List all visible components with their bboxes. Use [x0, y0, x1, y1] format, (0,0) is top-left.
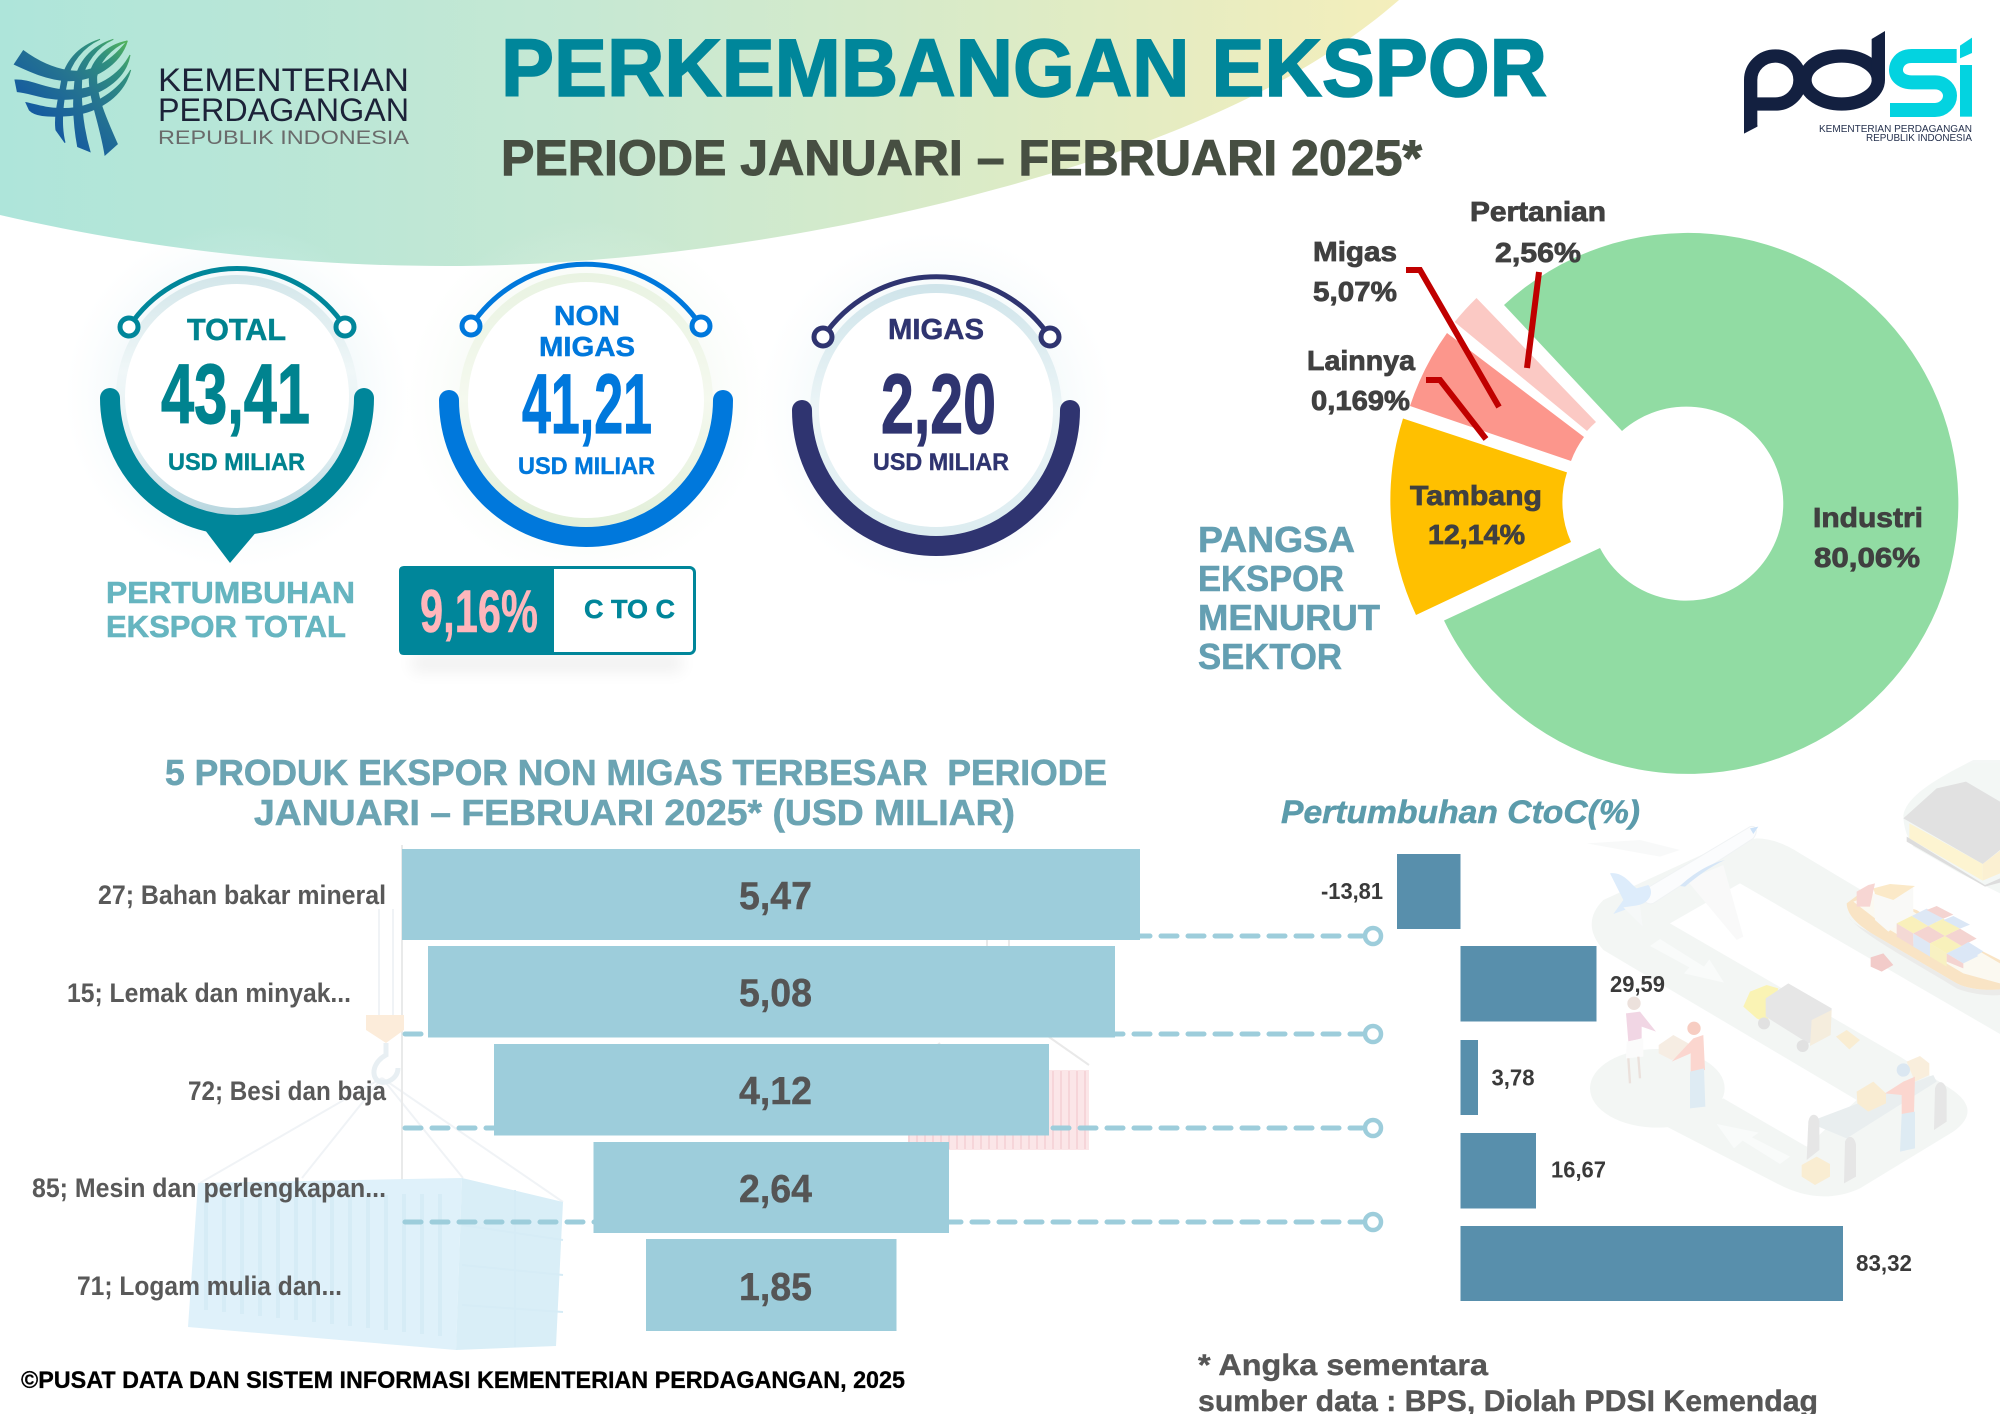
label line 1: NON [554, 300, 620, 331]
growth value: 9,16% [420, 578, 538, 645]
red container cables [908, 930, 1089, 1070]
bar: 85 [594, 1142, 949, 1233]
value: 43,41 [161, 347, 310, 441]
value: 41,21 [522, 357, 652, 451]
logo text line 1: KEMENTERIAN [158, 62, 409, 98]
people handing parcel [1626, 997, 1705, 1108]
conveyor with worker [1802, 1056, 1947, 1185]
bar: 15 [428, 946, 1115, 1038]
labels: 5,07% [1313, 276, 1397, 307]
category labels: 15; Lemak dan minyak... [67, 978, 351, 1008]
crane hook block [366, 1015, 404, 1043]
growth heading: PERTUMBUHAN [106, 575, 355, 610]
logo text line 3: REPUBLIK INDONESIA [158, 127, 409, 149]
labels: Pertanian [1470, 196, 1606, 227]
dashed connectors [405, 928, 1381, 1230]
bar values: -13,81 [1321, 878, 1383, 904]
pdsi caption line 2: REPUBLIK INDONESIA [1866, 132, 1972, 144]
container ridges [206, 1190, 563, 1347]
logo: PDSI [1744, 31, 1972, 144]
products heading: 5 PRODUK EKSPOR NON MIGAS TERBESAR PERIODE [165, 752, 1107, 793]
road [1592, 838, 2000, 1196]
growth heading [106, 575, 355, 644]
labels: Industri [1813, 502, 1923, 533]
labels: Lainnya [1307, 345, 1415, 376]
unit: USD MILIAR [873, 449, 1009, 476]
category labels: 85; Mesin dan perlengkapan... [32, 1173, 386, 1203]
person blob [1590, 1049, 1725, 1128]
slice: pertanian [1455, 298, 1596, 431]
airplane [1587, 826, 1758, 940]
growth value box [399, 566, 694, 672]
value: 2,20 [881, 357, 996, 451]
bar: 71 [646, 1239, 896, 1331]
logo text line 2: PERDAGANGAN [158, 92, 409, 128]
logo: Kementerian Perdagangan [14, 39, 409, 155]
labels: 0,169% [1311, 385, 1410, 416]
bar values: 3,78 [1492, 1064, 1535, 1090]
warehouse [1903, 782, 2000, 887]
bar: 83,32 [1460, 1226, 1843, 1301]
bar chart: growth CtoC [1321, 854, 1912, 1301]
leader line: migas [1406, 270, 1499, 407]
bar values [1321, 878, 1912, 1276]
slice: tambang [1390, 418, 1571, 615]
slice: migas and lainnya [1410, 333, 1584, 461]
unit: USD MILIAR [168, 449, 305, 476]
bar values: 5,08 [739, 972, 812, 1015]
source note [1198, 1349, 1818, 1414]
bar: 29,59 [1460, 946, 1596, 1022]
donut chart: export share by sector [1307, 196, 1958, 774]
crane cables [200, 909, 563, 1202]
donut heading: SEKTOR [1198, 636, 1342, 677]
labels: 2,56% [1495, 237, 1581, 268]
crane hook [374, 1043, 398, 1082]
category labels: 27; Bahan bakar mineral [98, 880, 386, 910]
growth heading: EKSPOR TOTAL [106, 609, 346, 644]
gauge: total [65, 224, 409, 568]
red container ridges [908, 1071, 1089, 1149]
labels: Tambang [1410, 480, 1542, 511]
bar values [739, 875, 812, 1309]
labels [1307, 196, 1923, 573]
main title: PERKEMBANGAN EKSPOR [501, 23, 1547, 114]
label line 2: MIGAS [539, 331, 635, 362]
gauge: non migas [406, 220, 766, 580]
donut heading: MENURUT [1198, 597, 1380, 638]
emblem [14, 39, 131, 155]
copyright footer: ©PUSAT DATA DAN SISTEM INFORMASI KEMENTERIAN PERDAGANGAN, 2025 [21, 1367, 905, 1394]
source note: * Angka sementara [1198, 1349, 1488, 1382]
unit: USD MILIAR [518, 453, 655, 480]
bar values: 1,85 [739, 1266, 812, 1309]
category labels: 71; Logam mulia dan... [77, 1271, 342, 1301]
donut heading [1198, 519, 1380, 677]
category labels [32, 880, 387, 1301]
bar values: 5,47 [739, 875, 812, 918]
header background band [0, 0, 1399, 266]
truck [1743, 983, 1860, 1052]
gauge: migas [758, 232, 1114, 588]
subtitle: PERIODE JANUARI – FEBRUARI 2025* [501, 130, 1423, 186]
illustration: faded logistics scene [1587, 760, 2000, 1196]
bar values: 16,67 [1551, 1156, 1606, 1182]
bar: 72 [494, 1044, 1049, 1136]
growth basis: C TO C [584, 594, 675, 624]
bar: 27 [402, 849, 1140, 940]
crane mast line [401, 845, 403, 1335]
container side [456, 1178, 563, 1350]
leader line: pertanian [1527, 272, 1539, 368]
leader line: lainnya [1426, 380, 1486, 439]
donut heading: EKSPOR [1198, 558, 1344, 599]
bar: -13,81 [1397, 854, 1460, 929]
cargo ship [1847, 883, 2000, 995]
bar: 16,67 [1460, 1133, 1536, 1208]
red container [908, 1070, 1089, 1150]
bar values: 4,12 [739, 1070, 812, 1113]
donut heading: PANGSA [1198, 519, 1355, 560]
growth chart heading: Pertumbuhan CtoC(%) [1281, 794, 1640, 830]
products heading [165, 752, 1107, 833]
labels: Migas [1313, 236, 1397, 267]
illustration: faded hanging container and crane [188, 845, 1089, 1350]
warehouse backdrop [1903, 760, 2000, 893]
label: TOTAL [187, 313, 286, 347]
container front [188, 1178, 462, 1350]
category labels: 72; Besi dan baja [188, 1076, 387, 1106]
funnel chart: top 5 non-oil export products [32, 849, 1140, 1331]
label: MIGAS [888, 314, 984, 346]
pointer [205, 530, 258, 563]
pdsi caption line 1: KEMENTERIAN PERDAGANGAN [1819, 123, 1972, 135]
road arrows [1650, 939, 1790, 1164]
slice: industri [1444, 233, 1958, 774]
labels: 12,14% [1428, 519, 1525, 550]
bar values: 29,59 [1610, 971, 1665, 997]
pdsi mark [1744, 31, 1972, 134]
labels: 80,06% [1814, 542, 1920, 573]
bar values: 2,64 [739, 1168, 812, 1211]
bar values: 83,32 [1856, 1250, 1912, 1276]
bar: 3,78 [1460, 1040, 1478, 1115]
products heading: JANUARI – FEBRUARI 2025* (USD MILIAR) [254, 792, 1015, 833]
